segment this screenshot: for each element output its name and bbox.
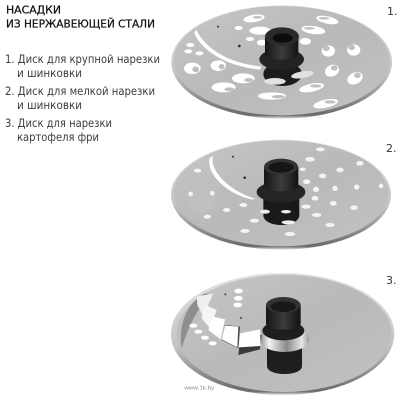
lower shaft — [263, 62, 302, 86]
hole shading — [192, 16, 361, 104]
label 3.: 3. — [386, 274, 396, 287]
list of discs — [5, 52, 160, 144]
item 2: и шинковки — [17, 98, 82, 112]
disc 3: french fries — [171, 273, 394, 395]
label 1.: 1. — [387, 5, 398, 18]
disc 1: coarse shredding — [171, 5, 392, 119]
heading: НАСАДКИ — [6, 4, 61, 16]
small punctures — [232, 156, 246, 179]
small punctures — [217, 26, 241, 47]
label 2.: 2. — [386, 142, 396, 155]
small punctures — [224, 293, 242, 319]
faint mark — [188, 184, 216, 212]
watermark: www.1k.by — [183, 386, 215, 392]
holes on shaft — [260, 210, 295, 224]
slicing slot — [209, 156, 256, 199]
item 3: картофеля фри — [17, 130, 99, 144]
small holes — [194, 147, 383, 236]
chrome ring — [259, 327, 309, 352]
item 1 — [5, 52, 160, 80]
item 3: 3. Диск для нарезки — [5, 116, 112, 130]
hub — [262, 297, 304, 340]
hub — [257, 159, 305, 203]
item 3 — [5, 116, 112, 144]
lower shaft — [267, 348, 302, 374]
coarse holes — [184, 13, 365, 110]
slicing slot — [194, 29, 261, 70]
lower holes on shaft — [264, 69, 314, 85]
item 1: и шинковки — [17, 66, 82, 80]
heading: ИЗ НЕРЖАВЕЮЩЕЙ СТАЛИ — [6, 18, 155, 30]
hub — [259, 27, 304, 70]
item 2: 2. Диск для мелкой нарезки — [5, 84, 155, 98]
side recess — [181, 293, 213, 348]
item 2 — [5, 84, 155, 112]
holes over faint mark — [188, 191, 215, 196]
item 1: 1. Диск для крупной нарезки — [5, 52, 160, 66]
cutting teeth — [197, 293, 262, 355]
disc 2: fine shredding — [171, 140, 391, 250]
heading — [6, 4, 155, 30]
small holes — [189, 289, 243, 345]
lower shaft — [263, 195, 299, 225]
